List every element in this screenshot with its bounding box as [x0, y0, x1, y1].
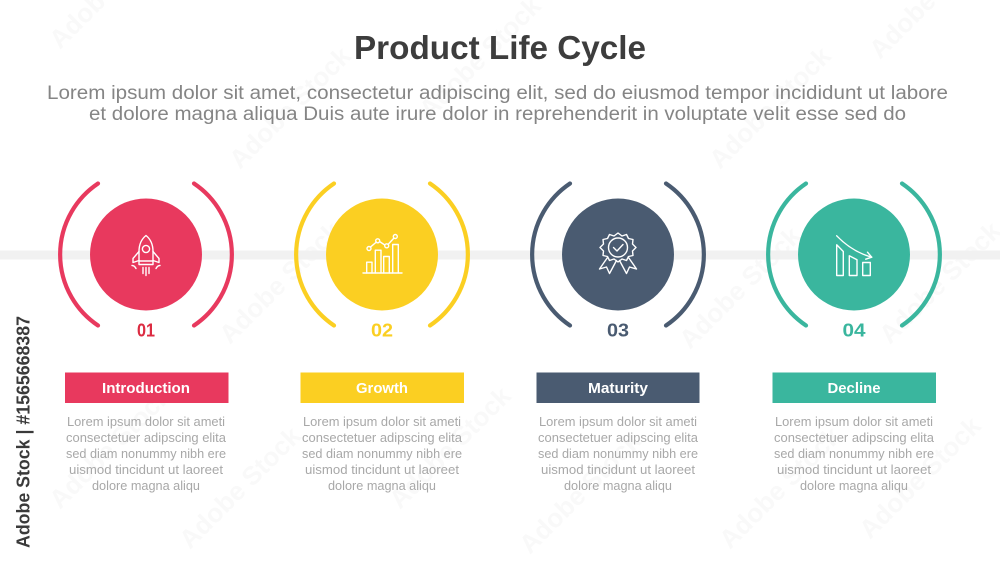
number: 03: 03 [607, 320, 629, 340]
text: Adobe Stock [673, 220, 807, 354]
text: Adobe Stock [173, 420, 307, 554]
text: growth: dolore magna aliqu [328, 478, 436, 493]
circle: decline [798, 198, 910, 310]
text: Adobe Stock [703, 40, 837, 174]
number: 02: 02 [371, 320, 393, 340]
text: maturity [538, 414, 699, 493]
text: decline [774, 414, 935, 493]
circle: growth [326, 198, 438, 310]
text: decline: Lorem ipsum dolor sit ameti [775, 414, 933, 429]
icon: rocket [132, 236, 160, 276]
text: growth: sed diam nonummy nibh ere [302, 446, 462, 461]
brackets: growth [296, 184, 468, 326]
text: introduction: sed diam nonummy nibh ere [66, 446, 226, 461]
panel: maturity [532, 184, 704, 493]
text: Adobe Stock [383, 380, 517, 514]
brackets: introduction [60, 184, 232, 326]
panel: decline [768, 184, 940, 493]
text: growth: consectetuer adipscing elita [302, 430, 463, 445]
text: decline: consectetuer adipscing elita [774, 430, 935, 445]
text: maturity: Lorem ipsum dolor sit ameti [539, 414, 697, 429]
text: Adobe Stock [223, 40, 357, 174]
text: growth: uismod tincidunt ut laoreet [305, 462, 459, 477]
text: Adobe Stock [513, 425, 647, 559]
text: Adobe Stock [213, 215, 347, 349]
text: introduction: uismod tincidunt ut laoreet [69, 462, 223, 477]
text: Adobe Stock [713, 420, 847, 554]
label bar: growth [300, 372, 464, 403]
text: introduction: consectetuer adipscing elita [66, 430, 227, 445]
text: decline: dolore magna aliqu [800, 478, 908, 493]
brackets: maturity [532, 184, 704, 326]
label bar: growth: Growth [356, 381, 408, 397]
icon: award ribbon [600, 233, 636, 274]
text: growth [302, 414, 463, 493]
text: maturity: sed diam nonummy nibh ere [538, 446, 698, 461]
label bar: maturity: Maturity [588, 381, 648, 397]
subtitle text [47, 83, 948, 125]
text: maturity: consectetuer adipscing elita [538, 430, 699, 445]
text: decline: sed diam nonummy nibh ere [774, 446, 934, 461]
label bar: introduction [65, 372, 228, 403]
text: Adobe Stock [43, 380, 177, 514]
number: 01: 01 [137, 320, 155, 340]
icon: chart [363, 234, 402, 273]
brackets: decline [768, 184, 940, 326]
label bar: maturity [536, 372, 700, 403]
text: introduction: Lorem ipsum dolor sit ameti [67, 414, 225, 429]
text: introduction: dolore magna aliqu [92, 478, 200, 493]
text: growth: Lorem ipsum dolor sit ameti [303, 414, 461, 429]
icon: declining chart [837, 236, 872, 276]
panel: growth [296, 184, 468, 493]
text: decline: uismod tincidunt ut laoreet [777, 462, 931, 477]
side credit text: Adobe Stock | #1565668387 [14, 316, 34, 548]
subtitle text: Lorem ipsum dolor sit amet, consectetur adipiscing elit, sed do eiusmod tempor incididunt ut labore [47, 83, 948, 104]
text: introduction [66, 414, 227, 493]
circle: introduction [90, 198, 202, 310]
text: maturity: uismod tincidunt ut laoreet [541, 462, 695, 477]
label bar: introduction: Introduction [102, 381, 190, 397]
circle: maturity [562, 198, 674, 310]
text: maturity: dolore magna aliqu [564, 478, 672, 493]
number: 04: 04 [842, 320, 866, 340]
label bar: decline: Decline [828, 381, 880, 397]
panel: introduction [60, 184, 232, 493]
text: Adobe Stock [853, 410, 987, 544]
subtitle text: et dolore magna aliqua Duis aute irure dolor in reprehenderit in voluptate velit esse sed do [89, 104, 906, 125]
title: Product Life Cycle [354, 29, 646, 66]
label bar: decline [772, 372, 936, 403]
